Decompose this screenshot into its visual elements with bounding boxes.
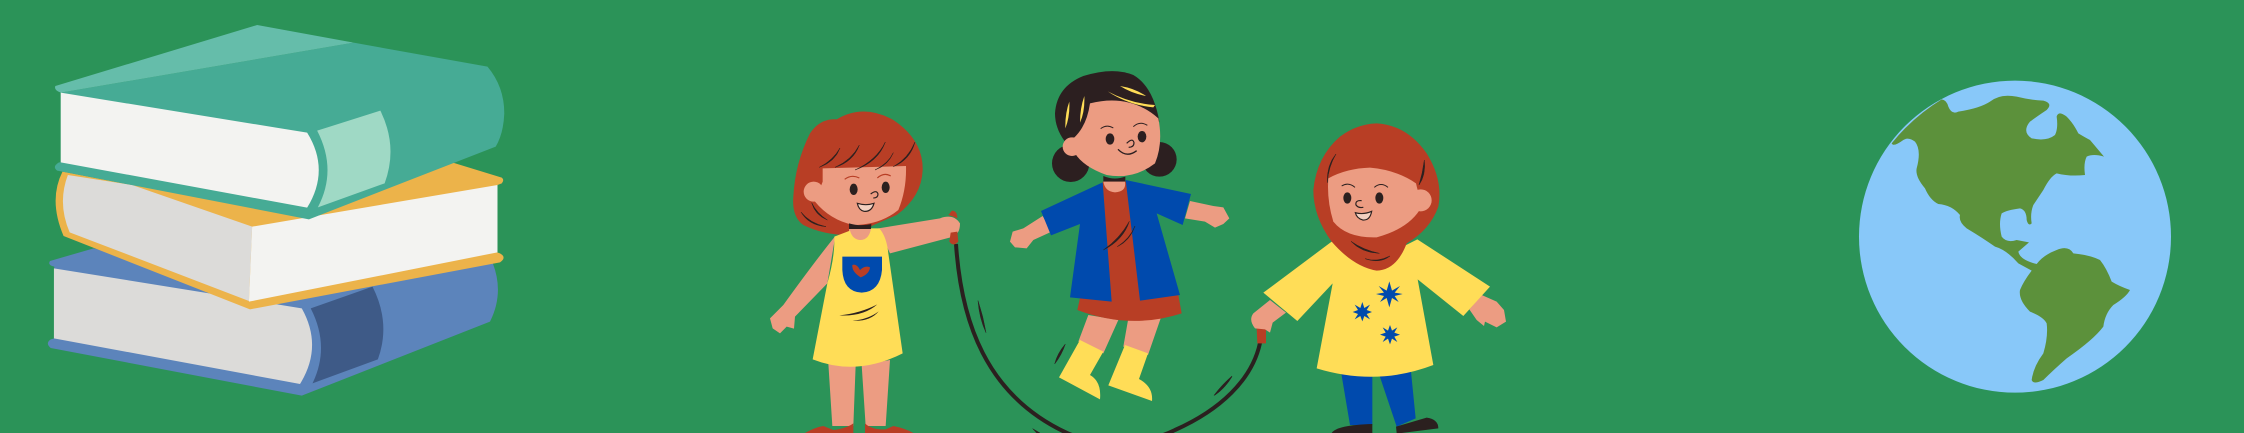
- character: girl with red headscarf: [1214, 123, 1506, 433]
- boots: [1059, 340, 1152, 401]
- face: [1063, 100, 1160, 176]
- character: jumping girl with dark hair: [978, 71, 1232, 433]
- yellow dress: [813, 228, 903, 367]
- star decorations: [1353, 281, 1403, 344]
- pocket with heart: [842, 257, 882, 293]
- arms and rope handle: [1251, 295, 1506, 343]
- red dress: [1077, 176, 1182, 321]
- arms: [1010, 201, 1229, 248]
- face: [804, 166, 906, 225]
- jump rope: [956, 244, 1260, 433]
- icon: stack of books: [48, 25, 504, 396]
- neck: [849, 223, 871, 242]
- headscarf: [1313, 123, 1439, 271]
- hair highlights: [1065, 86, 1155, 128]
- face: [1328, 168, 1432, 237]
- continents: [1892, 96, 2130, 382]
- hair: [793, 111, 923, 235]
- ocean: [1859, 81, 2171, 393]
- blue trousers: [1341, 372, 1416, 427]
- shoes: [1332, 418, 1438, 433]
- yellow tunic: [1263, 239, 1490, 377]
- legs and sandals: [805, 360, 913, 433]
- scarf folds: [1327, 154, 1425, 261]
- arms: [770, 211, 960, 333]
- rope motion mark: [1214, 376, 1232, 395]
- blue jacket: [1041, 180, 1191, 302]
- character: girl with red hair holding rope: [770, 111, 960, 433]
- icon: globe: [1859, 81, 2171, 393]
- middle yellow book: [56, 163, 504, 309]
- hair strands: [801, 142, 915, 227]
- bottom blue book: [48, 248, 498, 396]
- legs: [1078, 315, 1161, 355]
- top teal book: [55, 25, 504, 219]
- hair and buns: [1052, 71, 1177, 182]
